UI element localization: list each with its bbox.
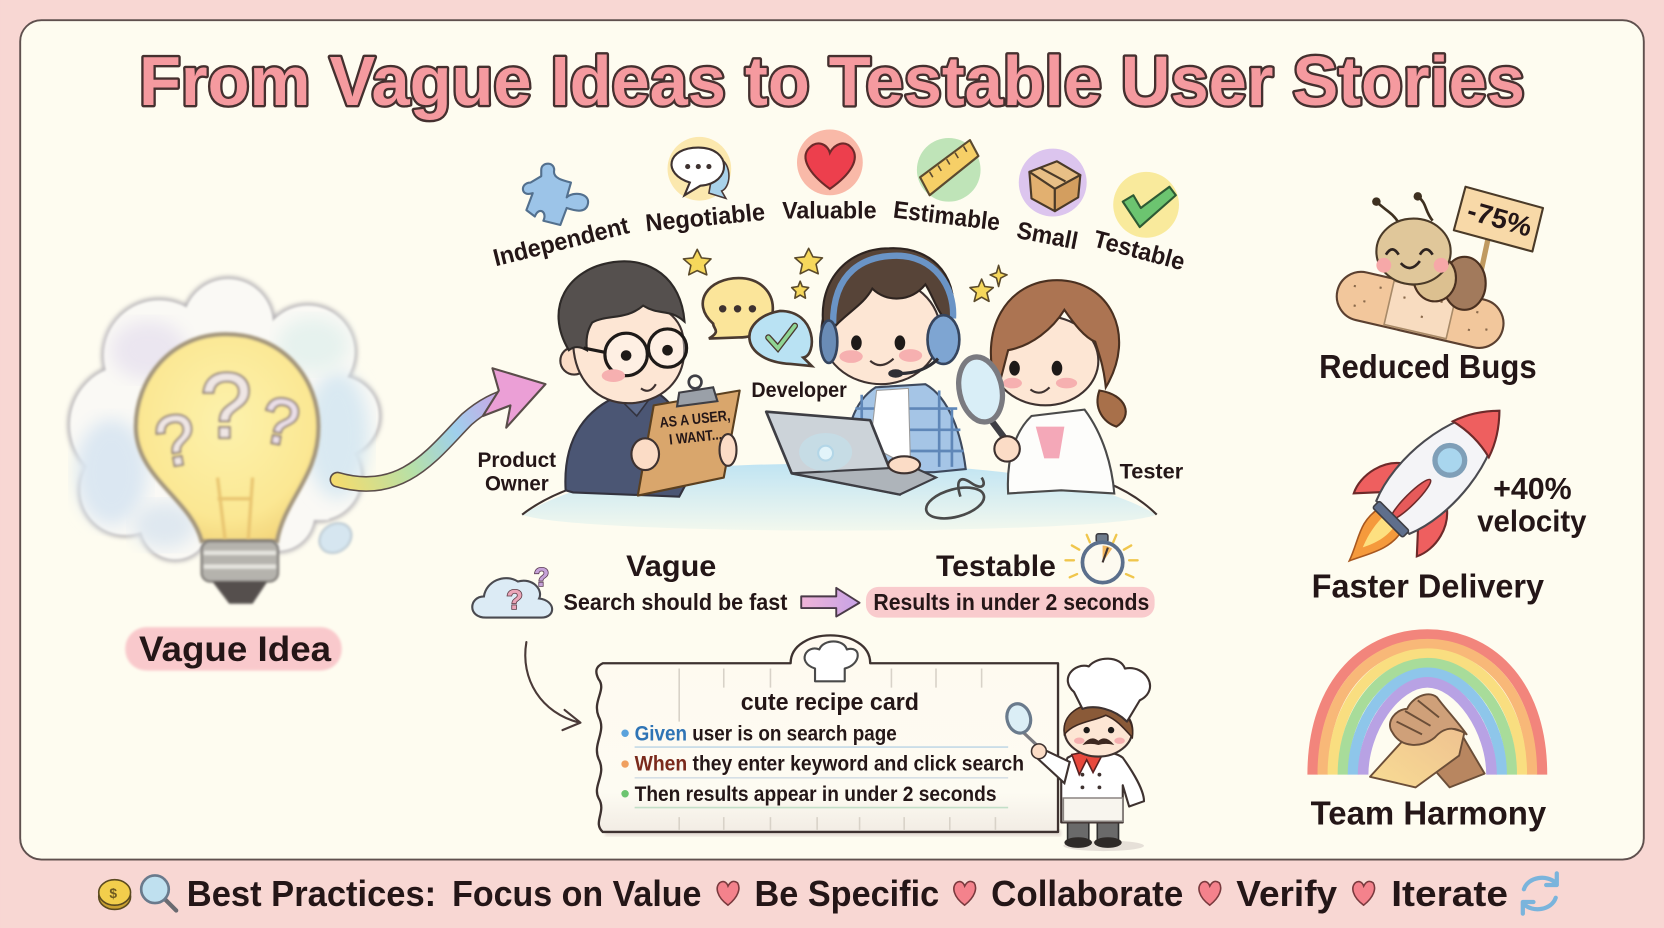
table edge xyxy=(522,465,1157,515)
text: vague requirement: Search should be fast xyxy=(564,589,788,615)
testable example xyxy=(866,534,1155,618)
rocket body xyxy=(1370,388,1523,541)
question marks xyxy=(150,355,304,482)
coat xyxy=(1061,751,1144,822)
antennae xyxy=(1376,196,1433,223)
label: product owner: Product xyxy=(478,449,556,472)
window xyxy=(1429,439,1471,481)
icon: testable check xyxy=(1113,172,1179,238)
label: tester: Tester xyxy=(1120,461,1183,484)
sign xyxy=(1454,187,1543,251)
bulb base xyxy=(202,541,278,604)
bug head xyxy=(1376,219,1451,284)
scarf xyxy=(1072,748,1106,775)
INVEST criteria row xyxy=(491,129,1188,276)
icon: valuable heart xyxy=(797,129,863,195)
buttons xyxy=(1081,773,1101,789)
icon: magnifier xyxy=(141,875,176,910)
label: developer: Developer xyxy=(751,379,847,402)
hair xyxy=(991,280,1119,391)
line: when: When they enter keyword and click search xyxy=(635,752,1024,775)
bandage xyxy=(1332,267,1508,353)
bug back xyxy=(1443,257,1486,310)
arm xyxy=(1038,750,1070,783)
text: be specific: Be Specific xyxy=(755,873,939,914)
heading: vague: Vague xyxy=(626,550,716,583)
shadow xyxy=(1063,840,1144,851)
label: velocity stat: velocity xyxy=(1477,504,1586,539)
label: velocity stat xyxy=(1477,471,1586,539)
character: product owner xyxy=(559,261,740,497)
icon: cloud with question: ? xyxy=(534,564,549,592)
coat xyxy=(1008,410,1114,493)
plaid pattern xyxy=(852,391,964,467)
nose xyxy=(1453,393,1517,457)
icon: bug on bandage xyxy=(1332,187,1543,353)
hand xyxy=(1032,744,1046,759)
small cloud puff xyxy=(314,517,357,559)
flame xyxy=(1337,507,1403,573)
icon: negotiable speech bubble xyxy=(668,137,731,201)
bulb filament xyxy=(218,478,253,539)
text: focus on value: Focus on Value xyxy=(452,873,701,914)
label: estimable: Estimable xyxy=(892,197,1001,237)
heading: cute recipe card: cute recipe card xyxy=(741,689,919,716)
text: iterate: Iterate xyxy=(1391,873,1508,914)
bug face xyxy=(1386,249,1433,255)
icon: chef hat xyxy=(805,641,858,681)
question marks: ? xyxy=(201,355,251,457)
icon: heart xyxy=(717,881,739,905)
icon: coin xyxy=(99,880,131,909)
clipboard xyxy=(638,376,740,496)
bubble: yellow xyxy=(703,278,773,339)
benefit: reduced bugs xyxy=(1319,187,1543,385)
question marks: ? xyxy=(257,384,304,460)
icon: rainbow xyxy=(1313,635,1542,775)
legs xyxy=(1068,817,1119,840)
eyes and mouth xyxy=(851,335,862,350)
text: verify: Verify xyxy=(1236,873,1337,914)
spoon magnifier xyxy=(1023,732,1039,747)
apron xyxy=(1063,798,1123,821)
card ticks xyxy=(679,669,995,830)
character: chef xyxy=(1004,659,1150,851)
benefit: team harmony xyxy=(1311,635,1547,832)
hair xyxy=(823,248,953,337)
pink shirt xyxy=(1036,427,1064,458)
arrow: curved to recipe card xyxy=(525,642,581,730)
label: team harmony: Team Harmony xyxy=(1311,795,1547,832)
label: faster delivery: Faster Delivery xyxy=(1312,567,1545,604)
icon: heart xyxy=(954,881,976,905)
icon: refresh arrows xyxy=(1523,873,1557,914)
line: then: Then results appear in under 2 seconds xyxy=(635,783,996,806)
text: collaborate: Collaborate xyxy=(991,873,1183,914)
stars xyxy=(683,248,1007,301)
nozzle xyxy=(1373,501,1409,538)
icon: estimable ruler xyxy=(917,138,981,202)
laptop xyxy=(766,412,936,495)
icon: heart xyxy=(1353,881,1375,905)
table xyxy=(522,464,1157,531)
label: reduced bugs: Reduced Bugs xyxy=(1319,348,1537,385)
headphones xyxy=(833,256,953,324)
character: developer xyxy=(766,248,987,524)
tee xyxy=(870,388,911,467)
question marks: ? xyxy=(150,399,202,482)
face xyxy=(821,278,940,384)
bubble: blue check xyxy=(749,311,812,366)
vague example xyxy=(472,550,788,618)
sign post xyxy=(1475,240,1488,299)
face xyxy=(573,300,684,403)
pigtail xyxy=(1098,391,1126,427)
icon: independent puzzle xyxy=(523,164,588,225)
card shadow xyxy=(605,830,1061,836)
hands on keyboard xyxy=(888,456,920,473)
shirt xyxy=(846,384,966,472)
benefit: faster delivery xyxy=(1312,376,1586,604)
label: vague idea: Vague Idea xyxy=(139,630,332,669)
icon: vague idea light bulb in cloud xyxy=(70,279,379,604)
pill: testable requirement: Results in under 2 seconds xyxy=(873,589,1149,615)
icon: heart xyxy=(1199,881,1221,905)
character: tester xyxy=(953,280,1126,493)
arrow: rainbow idea arrow xyxy=(337,368,545,484)
recipe card xyxy=(596,635,1061,836)
hair xyxy=(559,261,684,350)
footer: best practices xyxy=(99,873,1557,914)
chef toque xyxy=(1068,659,1150,722)
label: independent: Independent xyxy=(491,212,632,272)
card body xyxy=(596,635,1058,832)
icon: rocket xyxy=(1315,376,1534,595)
label: small: Small xyxy=(1014,217,1080,255)
clipboard: AS A USER, xyxy=(659,408,731,432)
thought cloud xyxy=(70,279,379,559)
label: velocity stat: +40% xyxy=(1493,471,1572,506)
icon: cloud with question xyxy=(472,564,552,618)
label: valuable: Valuable xyxy=(782,198,877,225)
icon: stopwatch xyxy=(1065,534,1138,583)
mic xyxy=(900,359,938,374)
arrow: vague to testable xyxy=(801,588,860,617)
label: product owner xyxy=(478,449,556,495)
body xyxy=(565,395,695,497)
mouse xyxy=(923,478,987,524)
glasses xyxy=(584,329,687,376)
icon: cloud with question: ? xyxy=(506,584,523,615)
label: negotiable: Negotiable xyxy=(644,199,766,237)
speech bubbles xyxy=(703,278,812,366)
bulb glass xyxy=(136,334,318,541)
face xyxy=(1083,727,1090,733)
icon: coin: $ xyxy=(109,886,117,901)
head xyxy=(1064,704,1132,757)
eyes and mouth xyxy=(621,350,631,361)
hands xyxy=(631,438,659,470)
fins xyxy=(1351,448,1412,510)
title: From Vague Ideas to Testable User Stories xyxy=(139,42,1525,120)
sign: -75% xyxy=(1464,195,1536,243)
line: given: Given user is on search page xyxy=(635,723,897,746)
face xyxy=(992,316,1098,405)
clipboard: I WANT... xyxy=(668,427,723,449)
ear xyxy=(560,347,588,375)
hair xyxy=(1064,704,1133,738)
magnifier xyxy=(953,353,1020,462)
label: testable: Testable xyxy=(1090,226,1188,276)
center fin xyxy=(1388,476,1434,523)
icon: small box xyxy=(1019,149,1087,216)
icon: clasped hands xyxy=(1370,694,1485,787)
heading: testable: Testable xyxy=(936,550,1056,583)
label: product owner: Owner xyxy=(485,472,549,495)
collar xyxy=(618,397,649,416)
eyes and mouth xyxy=(1009,361,1020,376)
text: best practices: Best Practices: xyxy=(187,873,436,914)
